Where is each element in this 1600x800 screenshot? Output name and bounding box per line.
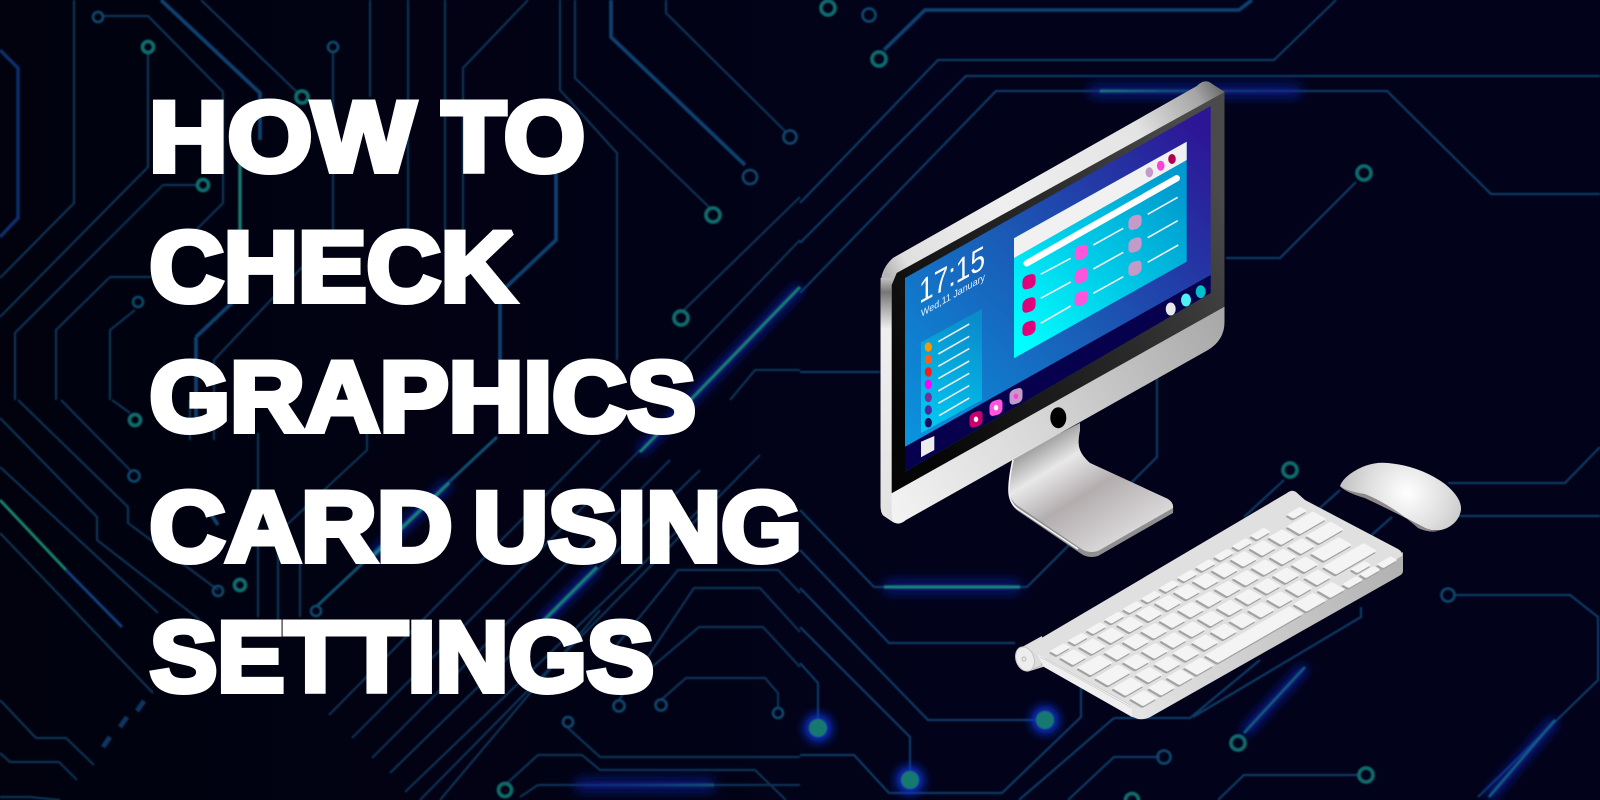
filled glowing nodes	[804, 706, 1059, 794]
monitor	[881, 81, 1224, 524]
webcam	[1050, 407, 1066, 428]
power cylinder	[1012, 636, 1046, 674]
keyboard	[1012, 491, 1403, 719]
title: CARD	[150, 471, 452, 582]
title: GRAPHICS	[150, 341, 696, 452]
keyboard front edge	[1130, 552, 1403, 719]
taskbar	[905, 275, 1211, 472]
monitor body and chin	[881, 81, 1224, 524]
mouse	[1340, 463, 1461, 532]
clock: Wed,11 January	[921, 271, 985, 320]
main window	[1014, 142, 1187, 358]
keys	[1049, 505, 1397, 706]
top edge	[881, 81, 1224, 290]
taskbar icons	[921, 285, 1206, 457]
side panel	[921, 309, 982, 433]
title: HOW	[149, 81, 416, 192]
screen	[905, 106, 1211, 472]
title	[149, 81, 802, 712]
bezel	[892, 92, 1224, 493]
title: SETTINGS	[150, 601, 654, 712]
title: CHECK	[150, 211, 515, 322]
title: TO	[442, 81, 585, 192]
title: USING	[473, 471, 802, 582]
monitor stand	[1009, 423, 1173, 557]
keyboard top surface	[1027, 491, 1402, 708]
clock: 17:15	[919, 238, 985, 311]
clock	[919, 238, 985, 320]
left edge	[881, 278, 893, 522]
